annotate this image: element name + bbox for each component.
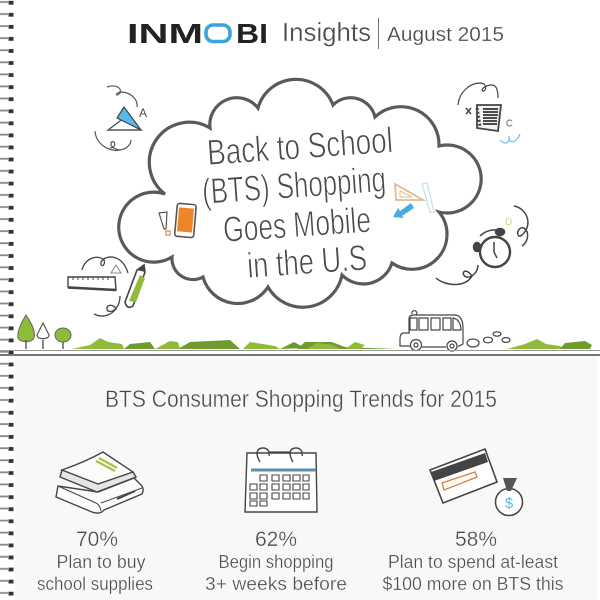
stat: school supplies — [37, 528, 153, 594]
header: Insights: Insights — [282, 17, 371, 47]
stat: school supplies: 70% — [76, 528, 118, 551]
cloud title: (BTS) Shopping — [201, 158, 387, 212]
stat: school supplies: school supplies — [37, 574, 153, 594]
icon: credit card — [430, 449, 497, 503]
icon: trees — [18, 315, 71, 349]
icon: phone — [175, 203, 196, 238]
header: date: August 2015 — [387, 24, 504, 46]
stat: shopping early: Begin shopping — [218, 552, 334, 572]
panel: lower trends background — [15, 356, 597, 600]
icon: ruler and triangle — [68, 257, 128, 290]
icon: notebook — [458, 83, 520, 143]
icon: pencil — [94, 265, 145, 316]
hills — [72, 338, 592, 349]
stat: spending: 58% — [455, 528, 497, 551]
stat: spending — [382, 528, 564, 594]
cloud title: Goes Mobile — [222, 199, 372, 250]
cloud — [119, 79, 481, 307]
stat: school supplies: Plan to buy — [56, 552, 146, 572]
ground lines — [0, 350, 600, 356]
icon: blue arrow — [393, 203, 414, 218]
icon: paper plane: A — [139, 106, 147, 120]
cloud title — [201, 119, 394, 286]
header: divider — [378, 18, 379, 49]
icon: books — [56, 452, 143, 513]
icon: exclamation mark — [159, 212, 170, 235]
icon: calendar — [245, 448, 317, 512]
icon: money bag: $ — [505, 495, 514, 512]
header: InMobi logo: BI — [236, 18, 268, 49]
stat: shopping early: 62% — [255, 528, 297, 551]
stat: spending: $100 more on BTS this — [382, 574, 564, 594]
notebook spiral binding — [0, 0, 14, 600]
icon: alarm clock — [436, 206, 528, 284]
stat: spending: Plan to spend at-least — [388, 552, 558, 572]
cloud title: Back to School — [206, 119, 394, 173]
stat: shopping early: 3+ weeks before — [205, 574, 347, 594]
section heading: BTS Consumer Shopping Trends for 2015 — [105, 386, 497, 413]
icon: alarm clock: D — [505, 217, 512, 228]
icon: school bus — [400, 311, 510, 351]
header: InMobi logo: INM — [127, 18, 203, 49]
stat: shopping early — [205, 528, 347, 594]
header: InMobi logo — [127, 18, 268, 49]
icon: money bag — [496, 478, 522, 516]
icon: set square — [395, 183, 434, 212]
cloud title: in the U.S — [246, 237, 368, 286]
icon: paper plane — [95, 86, 147, 150]
